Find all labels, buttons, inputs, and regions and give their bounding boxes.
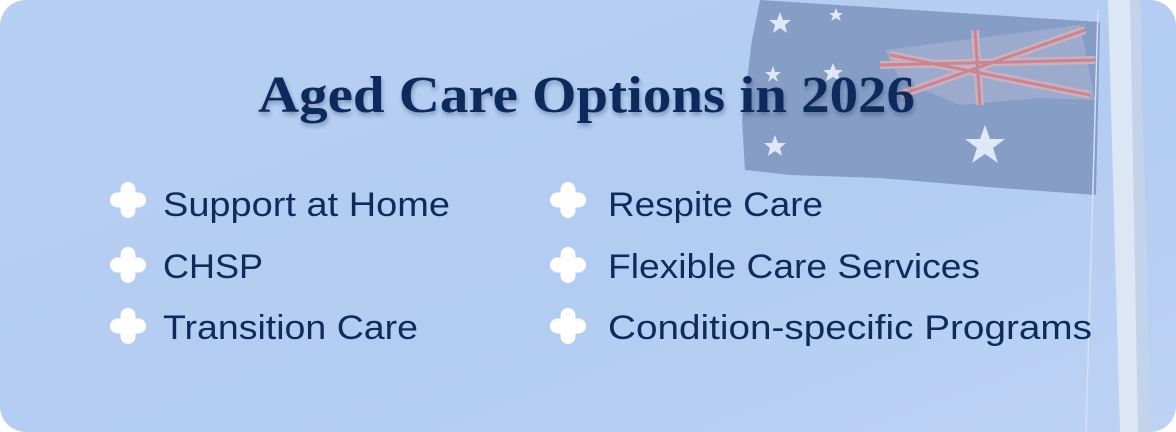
title: Aged Care Options in 2026 <box>258 67 915 124</box>
item: CHSP <box>110 247 263 286</box>
item: Support at Home: Support at Home <box>163 186 450 224</box>
list: left column <box>110 182 450 347</box>
item: Respite Care: Respite Care <box>608 186 823 224</box>
icon: flag stars <box>764 8 1005 163</box>
item: Support at Home <box>110 182 450 224</box>
list: right column <box>550 182 1092 347</box>
item: Condition-specific Programs: Condition-specific Programs <box>608 309 1092 347</box>
item: Transition Care: Transition Care <box>163 309 418 347</box>
flag pole <box>1108 0 1150 432</box>
item: CHSP: CHSP <box>163 248 263 286</box>
item: Flexible Care Services: Flexible Care Services <box>608 248 980 286</box>
item: Respite Care <box>550 182 823 224</box>
flag <box>742 0 1100 195</box>
